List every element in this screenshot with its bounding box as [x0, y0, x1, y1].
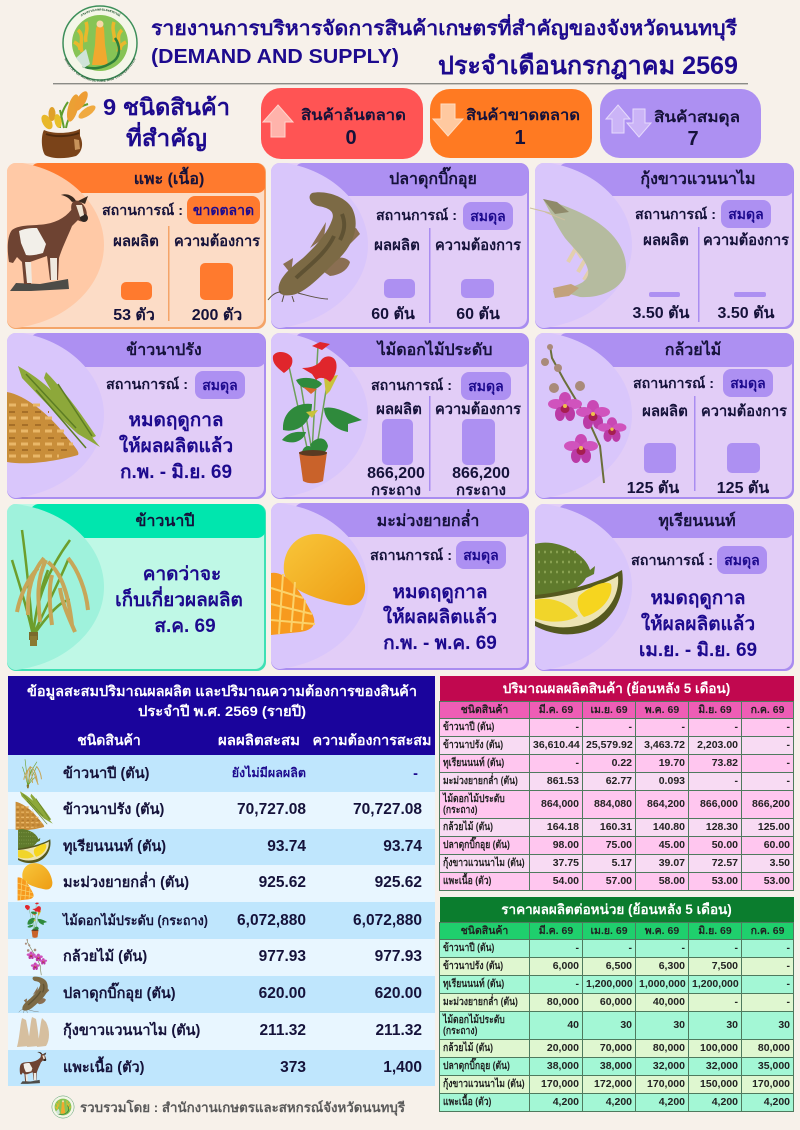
table: production volume: ปลาดุกบิ๊กอุย (ตัน) — [443, 839, 510, 851]
panel: cumulative table — [8, 676, 435, 1086]
status badge — [456, 541, 506, 569]
table: unit price: 30 — [726, 1019, 738, 1031]
situation label: สถานการณ์ : — [633, 375, 714, 391]
season note: หมดฤดูกาล — [128, 410, 224, 432]
table row: durian — [18, 829, 422, 863]
panel: orchid — [535, 333, 794, 499]
table: production volume: 25,579.92 — [586, 739, 633, 751]
table: production volume: พ.ค. 69 — [645, 704, 679, 716]
subtitle: (DEMAND AND SUPPLY) — [151, 46, 399, 68]
table: production volume: 19.70 — [659, 757, 685, 769]
panel: ornamental flowers: กระถาง — [456, 482, 506, 499]
bar: production — [384, 279, 415, 298]
table: unit price: ทุเรียนนนท์ (ตัน) — [443, 978, 504, 990]
table row: goat: 1,400 — [383, 1059, 422, 1076]
table row: flowers — [25, 902, 422, 938]
table: production volume: - — [576, 721, 579, 733]
table: production volume: 58.00 — [659, 875, 685, 887]
table: production volume: 53.00 — [764, 875, 790, 887]
table: production volume: แพะเนื้อ (ตัว) — [443, 875, 491, 887]
table row: shrimp: 211.32 — [259, 1022, 306, 1039]
panel: goat: 53 ตัว — [113, 306, 155, 324]
table: unit price: 4,200 — [606, 1096, 632, 1108]
table: production volume: 54.00 — [553, 875, 579, 887]
table: unit price: 6,500 — [606, 960, 632, 972]
table: production volume: ข้าวนาปี (ตัน) — [443, 721, 494, 733]
table row: orchid — [25, 939, 422, 975]
status badge — [463, 202, 513, 230]
table: production volume: มะม่วงยายกล่ำ (ตัน) — [443, 775, 518, 787]
illustration: goat — [8, 194, 90, 291]
table: unit price: มะม่วงยายกล่ำ (ตัน) — [443, 996, 518, 1008]
status box: shortage: สินค้าขาดตลาด — [466, 106, 580, 124]
season note: หมดฤดูกาล — [392, 582, 488, 604]
table title: ข้อมูลสะสมปริมาณผลผลิต และปริมาณความต้องการของสินค้า — [27, 683, 417, 700]
table: production volume: 57.00 — [606, 875, 632, 887]
table: unit price: 30 — [778, 1019, 790, 1031]
table: unit price: 1,200,000 — [586, 978, 633, 990]
table: unit price: 4,200 — [764, 1096, 790, 1108]
table: production volume: ทุเรียนนนท์ (ตัน) — [443, 757, 504, 769]
status box: balanced: สินค้าสมดุล — [654, 108, 740, 127]
panel: white shrimp: 3.50 ตัน — [633, 304, 690, 322]
table: production volume: - — [786, 739, 790, 751]
status badge — [187, 196, 260, 224]
icon: up and down arrows — [606, 105, 651, 137]
table row: durian: ทุเรียนนนท์ (ตัน) — [63, 837, 166, 855]
panel: white shrimp: ความต้องการ — [703, 232, 790, 249]
panel: catfish: ความต้องการ — [435, 237, 522, 254]
panel: goat: ความต้องการ — [174, 233, 261, 250]
table row: mango — [18, 863, 422, 900]
icon: sack of crops — [39, 89, 97, 158]
table: unit price: ก.ค. 69 — [751, 924, 784, 936]
table: production volume: มิ.ย. 69 — [698, 704, 732, 716]
table: production volume: ไม้ดอกไม้ประดับ — [443, 792, 505, 804]
logo: กระทรวงเกษตรและสหกรณ์ — [80, 8, 121, 16]
status box: oversupply: 0 — [345, 127, 357, 149]
table: unit price: 20,000 — [547, 1042, 579, 1054]
table: production volume: กุ้งขาวแวนนาไม (ตัน) — [443, 857, 525, 869]
status badge: สมดุล — [728, 206, 764, 223]
table: production volume: 864,200 — [647, 798, 685, 810]
table: unit price: 150,000 — [700, 1078, 738, 1090]
status badge: สมดุล — [202, 377, 238, 394]
season note: ก.พ. - พ.ค. 69 — [383, 633, 497, 654]
table: production volume: 0.22 — [612, 757, 632, 769]
table: unit price: 1,200,000 — [692, 978, 739, 990]
table: unit price: 80,000 — [653, 1042, 685, 1054]
bar: production — [382, 419, 413, 465]
panel: orchid: 125 ตัน — [717, 479, 769, 497]
table: production volume: - — [576, 757, 579, 769]
table: unit price: ราคาผลผลิตต่อหน่วย (ย้อนหลัง 5 เดือน) — [501, 902, 732, 917]
table: unit price: 40,000 — [653, 996, 685, 1008]
bar: production — [121, 282, 152, 300]
table: production volume: 45.00 — [659, 839, 685, 851]
table row: flowers: 6,072,880 — [237, 912, 306, 929]
status badge — [723, 369, 773, 397]
table: unit price: ชนิดสินค้า — [461, 924, 508, 936]
panel: white shrimp — [530, 163, 794, 329]
table: production volume: 884,080 — [594, 798, 632, 810]
panel: ornamental flowers: ผลผลิต — [376, 400, 422, 418]
commodity title: มะม่วงยายกล่ำ — [377, 509, 479, 530]
status badge: ขาดตลาด — [193, 202, 254, 218]
commodity title: กล้วยไม้ — [665, 340, 721, 359]
footer credit — [52, 1096, 405, 1118]
table column headers: ชนิดสินค้า — [77, 732, 141, 748]
table: unit price: 170,000 — [541, 1078, 579, 1090]
table title: ประจำปี พ.ศ. 2569 (รายปี) — [138, 703, 306, 719]
table: production volume: 36,610.44 — [533, 739, 580, 751]
panel: white shrimp: 3.50 ตัน — [718, 304, 775, 322]
table: production volume: 39.07 — [659, 857, 685, 869]
table row: off-season rice: 70,727.08 — [353, 801, 422, 818]
table: unit price: ไม้ดอกไม้ประดับ — [443, 1014, 505, 1026]
season note: ให้ผลผลิตแล้ว — [383, 605, 497, 628]
table: unit price: พ.ค. 69 — [645, 924, 679, 936]
table row: main-season rice: - — [413, 766, 418, 782]
table row: off-season rice: ข้าวนาปรัง (ตัน) — [63, 801, 165, 818]
table: production volume: 5.17 — [612, 857, 632, 869]
table: unit price: 172,000 — [594, 1078, 632, 1090]
logo: MINISTRY OF AGRICULTURE AND COOPERATIVES — [64, 58, 136, 82]
table row: goat: 373 — [280, 1059, 306, 1076]
table: production volume: กล้วยไม้ (ตัน) — [443, 821, 493, 833]
table row: main-season rice: ยังไม่มีผลผลิต — [232, 765, 306, 780]
table row: mango: มะม่วงยายกล่ำ (ตัน) — [63, 871, 189, 891]
harvest note: เก็บเกี่ยวผลผลิต — [115, 586, 243, 611]
table: production volume: มี.ค. 69 — [539, 704, 573, 716]
heading: 9 commodities: 9 ชนิดสินค้า — [103, 94, 230, 120]
table: unit price: 30 — [620, 1019, 632, 1031]
illustration: catfish — [268, 192, 360, 302]
table row: mango: 925.62 — [375, 874, 422, 891]
table: unit price: - — [787, 996, 790, 1008]
commodity title: ปลาดุกบิ๊กอุย — [389, 166, 477, 189]
harvest note: ส.ค. 69 — [154, 616, 216, 637]
table: unit price: 60,000 — [600, 996, 632, 1008]
table title — [27, 683, 417, 719]
table: unit price: ปลาดุกบิ๊กอุย (ตัน) — [443, 1060, 510, 1072]
table: unit price: 170,000 — [647, 1078, 685, 1090]
table: production volume: 73.82 — [712, 757, 738, 769]
season note — [119, 410, 233, 483]
table: production volume: - — [734, 721, 738, 733]
table: production volume: เม.ย. 69 — [590, 704, 628, 716]
status badge: สมดุล — [470, 208, 506, 225]
table: production volume: 866,200 — [752, 798, 790, 810]
table row: orchid: 977.93 — [375, 948, 422, 965]
bar: demand — [734, 292, 766, 297]
bar: demand — [727, 443, 760, 473]
table: production volume: ข้าวนาปรัง (ตัน) — [443, 739, 503, 751]
status box: shortage: 1 — [514, 127, 526, 149]
panel: ornamental flowers: ความต้องการ — [435, 401, 522, 418]
panel: goat: 200 ตัว — [192, 306, 242, 324]
table: unit price: - — [787, 942, 790, 954]
illustration: durian — [535, 543, 623, 634]
table column headers: ผลผลิตสะสม — [218, 732, 300, 748]
season note: ก.พ. - มิ.ย. 69 — [120, 462, 232, 483]
panel: off-season mango — [270, 503, 529, 670]
status badge: สมดุล — [730, 375, 766, 392]
table: production volume: 53.00 — [712, 875, 738, 887]
table: production volume: 50.00 — [712, 839, 738, 851]
table: production volume: 864,000 — [541, 798, 579, 810]
table: unit price: 70,000 — [600, 1042, 632, 1054]
table: unit price: 80,000 — [758, 1042, 790, 1054]
situation label: สถานการณ์ : — [631, 552, 713, 568]
table: production volume: - — [628, 721, 632, 733]
table: production volume: 3.50 — [770, 857, 790, 869]
table: unit price: (กระถาง) — [443, 1024, 477, 1036]
commodity title: ไม้ดอกไม้ประดับ — [376, 340, 492, 359]
table: unit price: ข้าวนาปี (ตัน) — [443, 942, 494, 954]
table row: flowers: 6,072,880 — [353, 912, 422, 929]
status badge — [717, 546, 767, 574]
status badge: สมดุล — [724, 552, 760, 569]
panel: ornamental flowers: กระถาง — [371, 482, 421, 499]
table: unit price: กุ้งขาวแวนนาไม (ตัน) — [443, 1078, 525, 1090]
status badge: สมดุล — [468, 378, 504, 395]
panel: catfish: 60 ตัน — [371, 305, 415, 323]
bar: demand — [461, 279, 494, 298]
table: unit price: - — [734, 942, 738, 954]
table: unit price: - — [628, 942, 632, 954]
report month: ประจำเดือนกรกฎาคม 2569 — [438, 52, 738, 80]
panel: orchid: 125 ตัน — [627, 479, 679, 497]
table: unit price: - — [787, 960, 790, 972]
table: unit price: กล้วยไม้ (ตัน) — [443, 1042, 493, 1054]
table: production volume: 75.00 — [606, 839, 632, 851]
panel: goat — [0, 161, 266, 329]
situation label: สถานการณ์ : — [376, 207, 457, 223]
table row: goat: แพะเนื้อ (ตัว) — [63, 1056, 145, 1076]
table row: catfish: ปลาดุกบิ๊กอุย (ตัน) — [63, 982, 176, 1002]
illustration: mango — [271, 534, 365, 635]
table: production volume: 37.75 — [553, 857, 579, 869]
table: unit price: 32,000 — [653, 1060, 685, 1072]
commodity title: แพะ (เนื้อ) — [134, 166, 204, 188]
season note: ให้ผลผลิตแล้ว — [641, 612, 755, 635]
table: production volume: - — [786, 721, 790, 733]
status box: balanced: 7 — [687, 128, 699, 150]
commodity title: ทุเรียนนนท์ — [658, 511, 736, 531]
table: production volume: 861.53 — [547, 775, 579, 787]
table: unit price: 6,000 — [553, 960, 579, 972]
status badge: สมดุล — [463, 547, 499, 564]
table: production volume: (กระถาง) — [443, 804, 477, 816]
table: production volume: 140.80 — [653, 821, 685, 833]
table: production volume: 62.77 — [606, 775, 632, 787]
status box: oversupply — [261, 88, 423, 159]
harvest note: คาดว่าจะ — [143, 564, 221, 585]
panel: white shrimp: ผลผลิต — [643, 231, 689, 249]
table: unit price: - — [576, 942, 579, 954]
table: unit price: 40 — [567, 1019, 579, 1031]
title: รายงานการบริหารจัดการสินค้าเกษตรที่สำคัญของจังหวัดนนทบุรี — [151, 13, 737, 41]
status badge — [195, 371, 245, 399]
situation label: สถานการณ์ : — [370, 547, 452, 563]
table column headers — [77, 732, 432, 748]
panel: orchid: ความต้องการ — [701, 403, 788, 420]
table column headers: ความต้องการสะสม — [312, 732, 432, 748]
situation label: สถานการณ์ : — [102, 202, 183, 218]
illustration: anthurium — [273, 342, 362, 483]
table row: shrimp — [17, 1017, 422, 1047]
table: unit price: 7,500 — [712, 960, 738, 972]
table row: orchid: กล้วยไม้ (ตัน) — [63, 947, 147, 965]
table: production volume: - — [786, 775, 790, 787]
icon: down arrow — [433, 104, 463, 136]
table: production volume: - — [734, 775, 738, 787]
table: unit price: 35,000 — [758, 1060, 790, 1072]
table row: off-season rice: 70,727.08 — [237, 801, 306, 818]
table: production volume: 160.31 — [600, 821, 632, 833]
panel: catfish: ผลผลิต — [374, 236, 420, 254]
table row: flowers: ไม้ดอกไม้ประดับ (กระถาง) — [61, 912, 208, 928]
icon: up arrow — [263, 105, 293, 137]
panel: off-season rice — [0, 331, 266, 499]
illustration: orchid — [541, 344, 626, 483]
table: unit price: 6,300 — [659, 960, 685, 972]
table: unit price: 80,000 — [547, 996, 579, 1008]
table row: durian: 93.74 — [267, 838, 306, 855]
table: production volume: ชนิดสินค้า — [461, 704, 508, 716]
table: unit price — [439, 897, 794, 1112]
heading: 9 commodities — [103, 94, 230, 152]
table: production volume: 3,463.72 — [644, 739, 685, 751]
table: unit price: มิ.ย. 69 — [698, 924, 732, 936]
season note: เม.ย. - มิ.ย. 69 — [639, 640, 757, 661]
table row: off-season rice — [16, 791, 422, 830]
table: unit price: 30 — [673, 1019, 685, 1031]
table row: goat — [20, 1052, 422, 1084]
bar: demand — [200, 263, 233, 300]
table: production volume: 2,203.00 — [697, 739, 738, 751]
table: production volume: 164.18 — [547, 821, 579, 833]
table: unit price: 1,000,000 — [639, 978, 686, 990]
table row: catfish: 620.00 — [259, 985, 306, 1002]
table row: durian: 93.74 — [383, 838, 422, 855]
table: unit price: 4,200 — [712, 1096, 738, 1108]
table: unit price: 170,000 — [752, 1078, 790, 1090]
illustration: shrimp — [530, 199, 626, 298]
table: production volume: 128.30 — [706, 821, 738, 833]
status box: shortage — [430, 89, 592, 158]
season note — [383, 582, 497, 654]
table: production volume: 866,000 — [700, 798, 738, 810]
status badge — [461, 372, 511, 400]
table: unit price: มี.ค. 69 — [539, 924, 573, 936]
bar: demand — [462, 419, 495, 465]
panel: orchid: ผลผลิต — [642, 402, 688, 420]
table: production volume — [439, 676, 794, 891]
table row: catfish — [19, 977, 422, 1013]
commodity title: ข้าวนาปี — [136, 511, 194, 530]
season note — [639, 588, 757, 661]
table: production volume: ก.ค. 69 — [751, 704, 784, 716]
table: unit price: 100,000 — [700, 1042, 738, 1054]
table: unit price: - — [576, 978, 579, 990]
commodity title: กุ้งขาวแวนนาไม — [640, 169, 756, 189]
logo — [62, 5, 138, 82]
table: unit price: 38,000 — [600, 1060, 632, 1072]
table: unit price: 4,200 — [659, 1096, 685, 1108]
table: unit price: - — [734, 996, 738, 1008]
illustration: rice plant — [12, 530, 88, 646]
table: production volume: 72.57 — [712, 857, 738, 869]
table: unit price: ข้าวนาปรัง (ตัน) — [443, 960, 503, 972]
panel: ornamental flowers: 866,200 — [367, 465, 425, 482]
bar: production — [649, 292, 680, 297]
table: unit price: 38,000 — [547, 1060, 579, 1072]
panel: goat: ผลผลิต — [113, 232, 159, 250]
table row: catfish: 620.00 — [375, 985, 422, 1002]
table: production volume: ปริมาณผลผลิตสินค้า (ย้อนหลัง 5 เดือน) — [503, 681, 730, 696]
commodity title: ข้าวนาปรัง — [126, 341, 202, 359]
panel: catfish — [268, 163, 529, 329]
table row: mango: 925.62 — [259, 874, 306, 891]
season note: หมดฤดูกาล — [650, 588, 746, 610]
table row: shrimp: 211.32 — [375, 1022, 422, 1039]
panel: catfish: 60 ตัน — [456, 305, 500, 323]
panel: ornamental flowers — [271, 333, 529, 499]
table: unit price: 32,000 — [706, 1060, 738, 1072]
panel: durian — [535, 504, 794, 671]
table: unit price: - — [787, 978, 790, 990]
table: production volume: 98.00 — [553, 839, 579, 851]
table: unit price: - — [682, 942, 685, 954]
situation label: สถานการณ์ : — [635, 206, 716, 222]
table: production volume: - — [682, 721, 685, 733]
heading: 9 commodities: ที่สำคัญ — [126, 121, 207, 152]
status box: balanced — [600, 89, 761, 158]
season note: ให้ผลผลิตแล้ว — [119, 434, 233, 457]
table: unit price: เม.ย. 69 — [590, 924, 628, 936]
table: production volume: 60.00 — [764, 839, 790, 851]
table: production volume: 0.093 — [659, 775, 685, 787]
table: unit price: แพะเนื้อ (ตัว) — [443, 1096, 491, 1108]
panel: ornamental flowers: 866,200 — [452, 465, 510, 482]
table row: main-season rice — [22, 759, 418, 788]
situation label: สถานการณ์ : — [106, 376, 188, 392]
table row: orchid: 977.93 — [259, 948, 306, 965]
table row: shrimp: กุ้งขาวแวนนาไม (ตัน) — [63, 1021, 201, 1039]
harvest note — [115, 564, 243, 637]
table row: main-season rice: ข้าวนาปี (ตัน) — [63, 765, 150, 782]
table: production volume: - — [786, 757, 790, 769]
table: unit price: 4,200 — [553, 1096, 579, 1108]
situation label: สถานการณ์ : — [371, 377, 452, 393]
bar: production — [644, 443, 676, 473]
status box: oversupply: สินค้าล้นตลาด — [301, 106, 406, 124]
panel: main-season rice — [0, 503, 266, 671]
footer credit: รวบรวมโดย : สำนักงานเกษตรและสหกรณ์จังหวัดนนทบุรี — [80, 1099, 405, 1116]
status badge — [721, 200, 771, 228]
illustration: rice pile — [7, 366, 100, 463]
table: production volume: 125.00 — [758, 821, 790, 833]
